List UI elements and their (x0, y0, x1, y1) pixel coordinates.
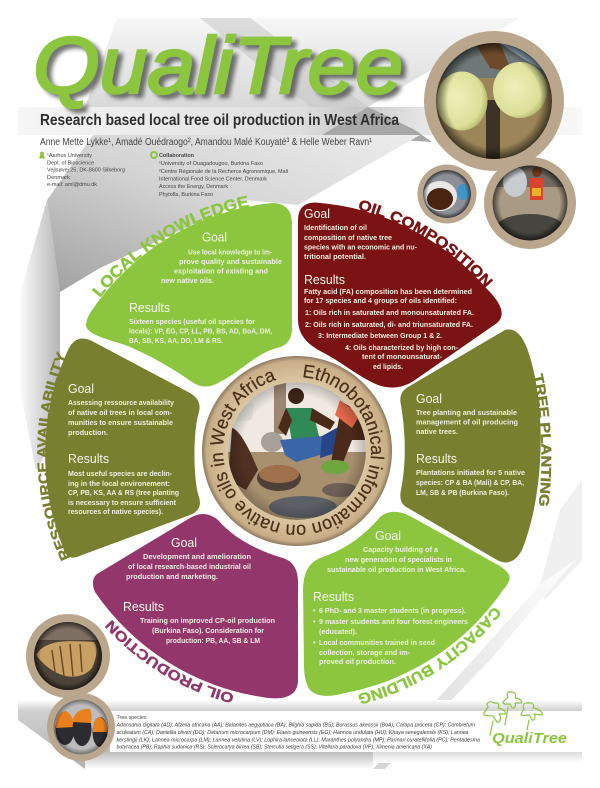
tree species list (116, 715, 480, 750)
panel shape (86, 203, 292, 386)
results text: is necessary to ensure sufficient (68, 498, 176, 507)
goal text: exploitation of existing and (174, 266, 268, 276)
panel shape (93, 514, 298, 698)
center photo: women sorting nuts (228, 382, 366, 520)
results text: 1: Oils rich in saturated and monounsaturated FA. (305, 308, 474, 317)
panel: oil composition (298, 200, 502, 388)
goal text: prove quality and sustainable (179, 257, 282, 266)
icon: person (39, 152, 45, 158)
collaboration list: ²Centre Régionale de la Recherce Agronomique, Mali (159, 169, 288, 175)
photo: woman with metal bowl (484, 157, 576, 249)
goal text: new native oils. (161, 276, 214, 285)
goal heading: Goal (375, 529, 401, 543)
logo trees (484, 692, 542, 735)
goal text: Capacity building of a (363, 545, 439, 554)
goal text: new generation of specialists in (345, 555, 452, 564)
contact address (39, 152, 125, 188)
goal text (161, 248, 282, 285)
collaboration list: Phytofla, Burkina Faso (159, 192, 213, 198)
goal heading: Goal (171, 536, 197, 550)
title: QualiTree: QualiTree (33, 21, 403, 110)
results heading: Results (416, 452, 457, 466)
goal text: sustainable oil production in West Africa. (327, 565, 466, 574)
results text: BA, SB, KS, AA, DO, LM & RS. (129, 336, 223, 345)
goal heading: Goal (304, 207, 330, 221)
results heading: Results (68, 452, 109, 466)
results text (304, 287, 474, 371)
goal text: composition of native tree (304, 233, 392, 242)
panel shape (45, 338, 200, 558)
panel shape (298, 202, 502, 388)
results heading: Results (129, 301, 170, 315)
results text: production: PB, AA, SB & LM (166, 636, 260, 645)
goal text: of native oil trees in local com- (68, 408, 172, 417)
goal text: Development and amelioration (143, 552, 251, 561)
title: QualiTree: QualiTree (38, 25, 408, 114)
panel: local knowledge (86, 196, 292, 386)
results list: 9 master students and four forest engineers (319, 617, 468, 626)
goal text (416, 408, 518, 436)
contact address: ¹Aarhus University (47, 153, 92, 159)
curved label: OIL COMPOSITION (359, 200, 494, 288)
goal heading: Goal (68, 382, 94, 396)
results text: species: CP & BA (Mali) & CP, BA, (416, 478, 524, 487)
logo: QualiTree (484, 692, 567, 747)
tree species list: butyracea (PB); Raphia sudanica (RS); Sclerocarya birrea (SB); Sterculia setigera (SS); Vitellaria paradoxa (VP); Ximenia americana (XA) (116, 744, 432, 750)
results text (416, 468, 525, 497)
panel shape (400, 329, 541, 562)
icon: flower (151, 152, 157, 158)
results text: Most useful species are declin- (68, 469, 172, 478)
results text: tent of monounsaturat- (362, 352, 442, 361)
results heading: Results (123, 600, 164, 614)
curved label: RESSOURCE AVAILABILITY (37, 351, 70, 562)
results list (313, 606, 468, 666)
collaboration list: International Food Science Center, Denmark (159, 176, 267, 182)
results text (68, 469, 179, 516)
goal text: production. (68, 428, 108, 437)
curved label: TREE PLANTING (535, 373, 552, 506)
panel: tree planting (400, 329, 552, 562)
collaboration list: Access the Energy, Denmark (159, 184, 228, 190)
goal text: Use local knowledge to im- (188, 248, 272, 256)
collaboration list: ¹University of Ouagadougou, Burkina Faso (159, 161, 263, 167)
contact address: e-mail: aml@dmu.dk (47, 182, 97, 188)
goal text: munities to ensure sustainable (68, 418, 173, 427)
tree species list: Adansonia digitata (AD); Afzelia africana (AA); Balanites aegyptiaca (BA); Blighia sapida (BS); Borassus akeassii (BoA); Carapa procera (CP); Combretum (116, 722, 475, 728)
tree species list: Tree species (116, 715, 147, 721)
goal text: Identification of oil (304, 223, 367, 232)
contact address: Dept. of Bioscience (47, 160, 94, 166)
ring text: Ethnobotanical information on native oils in West Africa (210, 364, 384, 535)
center ring: ethnobotanical information (202, 356, 392, 546)
results text: locals): VP, EG, CP, LL, PB, BS, AD, BoA, DM, (129, 326, 272, 336)
results text: CP, PB, KS, AA & RS (tree planting (68, 488, 179, 497)
results text: Fatty acid (FA) composition has been determined (304, 287, 472, 296)
results text: ed lipids. (373, 362, 403, 371)
results text: Training on improved CP-oil production (140, 616, 275, 625)
panel: ressource availability (37, 338, 200, 562)
results text: 3: Intermediate between Group 1 & 2. (318, 331, 442, 340)
results heading: Results (304, 273, 345, 287)
results text: for 17 species and 4 groups of oils identified: (304, 296, 457, 305)
results list: Local communities trained in seed (319, 638, 435, 647)
results list: • (313, 638, 316, 647)
results list: • (313, 606, 316, 615)
subtitle: Research based local tree oil production in West Africa (40, 112, 399, 129)
results list: (educated). (319, 627, 357, 636)
tree species list: kerstingii (LK); Lannea microcarpa (LM); Lannea velutina (LV); Lophira lanceolata (LL); Maranthes polyandra (MP); Parinari curatellifolia (PC); Pentadesma (116, 738, 480, 744)
photo: opened shell (26, 614, 110, 698)
contact address: Denmark (47, 175, 70, 181)
results text: Plantations initiated for 5 native (416, 468, 525, 477)
authors: Anne Mette Lykke¹, Amadé Ouédraogo², Amandou Malé Kouyaté³ & Helle Weber Ravn¹ (40, 137, 373, 148)
curved label: OIL PRODUCTION (104, 620, 233, 702)
collaboration list (151, 152, 288, 198)
results list: proved oil production. (319, 657, 396, 666)
goal text: management of oil producing (416, 418, 518, 427)
goal text (126, 552, 251, 581)
panel: oil production (92, 514, 298, 702)
goal text: tritional potential. (304, 252, 366, 261)
photo: oil in bowl (418, 164, 476, 224)
results text (140, 616, 275, 645)
results text: ing in the local environement: (68, 479, 170, 488)
contact address: Vejlsøvej 25, DK-8600 Silkeborg (47, 168, 125, 174)
goal heading: Goal (202, 230, 227, 244)
tree species list: aculeatum (CA); Daniellia oliveri (DO); Detarium microcarpum (DM); Elaeis guineensis (EG); Hannoa undulata (HU); Khaya senegalensis (KS); Lannea (116, 730, 468, 736)
logo text: QualiTree (492, 730, 567, 747)
goal text: production and marketing. (126, 572, 218, 581)
panel: capacity building (303, 512, 510, 704)
results text: (Burkina Faso). Consideration for (152, 626, 264, 635)
goal text (304, 223, 417, 261)
curved label: LOCAL KNOWLEDGE (92, 196, 250, 298)
photo: shea fruits (424, 31, 564, 171)
results list: collection, storage and im- (319, 648, 410, 657)
results list: • (313, 617, 316, 626)
results text: LM, SB & PB (Burkina Faso). (416, 488, 509, 497)
goal text: native trees. (416, 427, 458, 436)
collaboration list: Collaboration (159, 153, 194, 159)
results text: 2: Oils rich in saturated, di- and triunsaturated FA. (305, 320, 473, 329)
panel shape (303, 512, 510, 696)
curved label: CAPACITY BUILDING (358, 608, 500, 704)
goal text: Assessing ressource availability (68, 398, 175, 407)
goal text: species with an economic and nu- (304, 242, 417, 252)
goal text: of local research-based industrial oil (128, 562, 251, 571)
goal heading: Goal (416, 392, 442, 406)
goal text: Tree planting and sustainable (416, 408, 517, 417)
goal text (327, 545, 466, 574)
goal text (68, 398, 175, 437)
results text (129, 317, 272, 345)
ring band (202, 356, 392, 546)
results text: Sixteen species (useful oil species for (129, 317, 255, 326)
results list: 6 PhD- and 3 master students (in progress). (319, 606, 466, 615)
results text: 4: Oils characterized by high con- (345, 343, 458, 352)
results heading: Results (313, 590, 354, 604)
photo: seeds (47, 693, 115, 761)
results text: resources of native species). (68, 507, 163, 516)
